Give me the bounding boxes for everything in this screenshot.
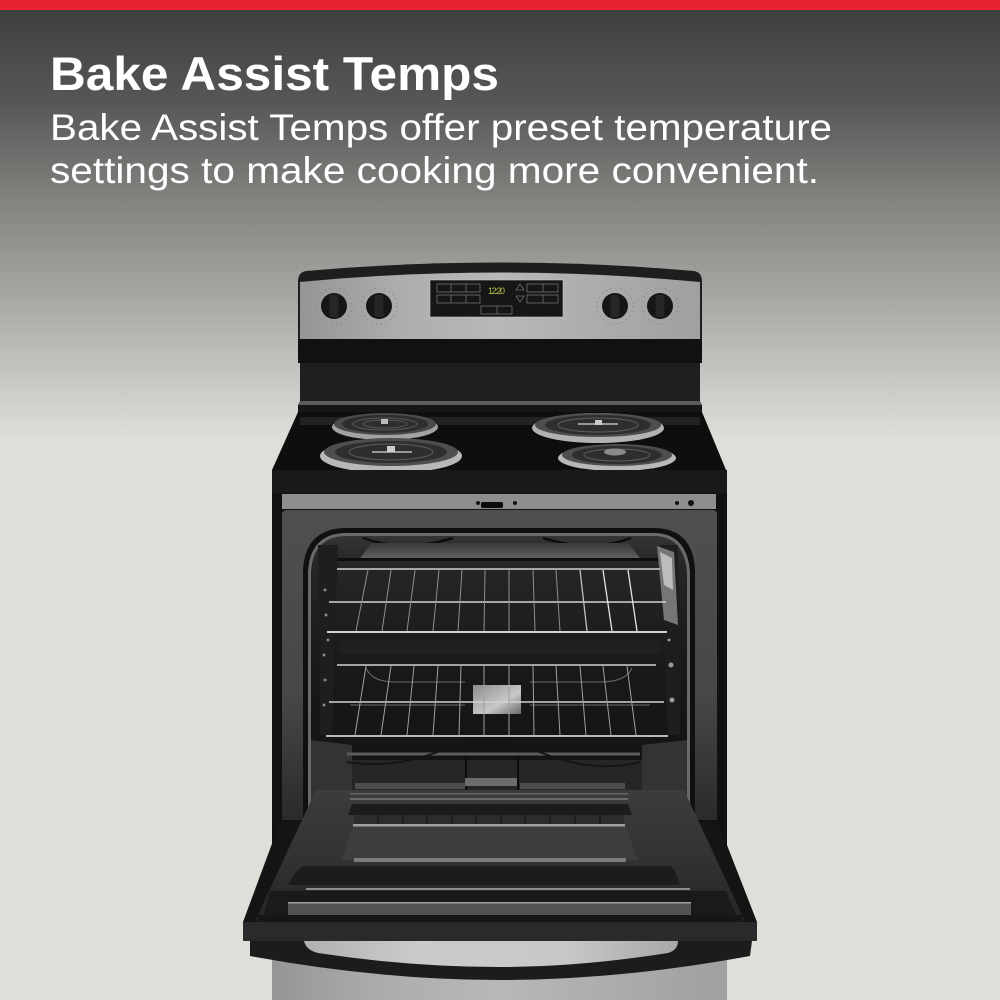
door embossed ridges xyxy=(258,866,742,922)
oven cavity xyxy=(303,528,695,830)
knob: right outer xyxy=(642,288,678,324)
side rack supports xyxy=(318,545,680,735)
heading: Bake Assist Temps xyxy=(50,47,499,100)
cooktop front edge xyxy=(272,470,727,493)
display panel xyxy=(430,280,563,317)
door window recess xyxy=(342,804,638,862)
burner: front left xyxy=(320,438,462,473)
lower oven rack xyxy=(326,665,668,736)
control panel xyxy=(298,262,702,345)
description text: Bake Assist Temps offer preset temperature xyxy=(50,107,832,148)
upper oven rack xyxy=(327,569,667,632)
backsplash xyxy=(298,339,702,417)
description text xyxy=(50,107,832,191)
description text: settings to make cooking more convenient. xyxy=(50,150,819,191)
burner: rear right xyxy=(532,413,664,443)
lower body and side walls xyxy=(272,490,727,960)
red top bar xyxy=(0,0,1000,10)
burner: front right xyxy=(558,444,676,471)
lower rack back support plate xyxy=(473,685,521,714)
clock readout: 12:20 xyxy=(488,286,505,296)
door front edge xyxy=(243,922,757,941)
bottom heating element xyxy=(347,743,640,766)
cooktop xyxy=(272,412,726,473)
knob: right inner xyxy=(597,288,633,324)
oven floor xyxy=(311,740,687,830)
top heating element xyxy=(363,538,631,546)
range oven illustration xyxy=(243,262,757,1000)
door latch strip xyxy=(282,494,716,509)
open oven door xyxy=(243,790,757,940)
door handle and lower front xyxy=(250,941,752,1000)
oven back wall light band xyxy=(360,543,640,558)
lower heating coils behind rack xyxy=(350,668,650,705)
burner: rear left xyxy=(332,413,438,440)
oven frame xyxy=(282,510,717,820)
knob: left inner xyxy=(361,288,397,324)
knob: left outer xyxy=(316,288,352,324)
